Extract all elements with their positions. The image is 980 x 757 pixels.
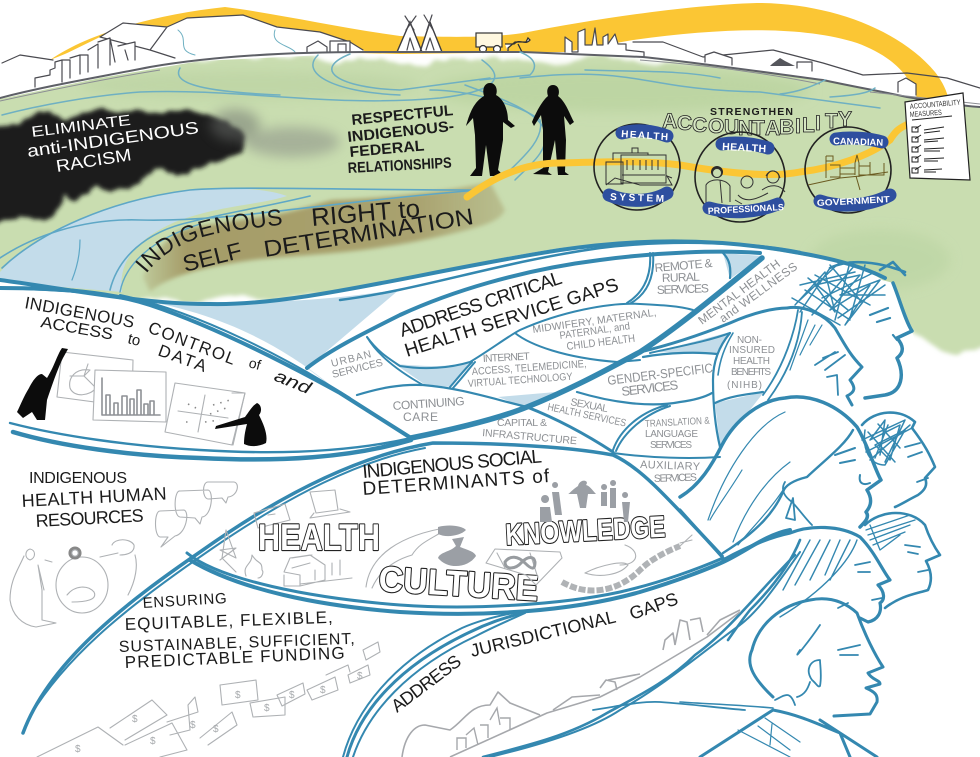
dollar bills <box>37 642 380 757</box>
jurisdictional gaps upper edge <box>347 612 525 757</box>
dollar bills: $ <box>357 671 363 682</box>
green landscape wash <box>0 60 980 352</box>
figure: right person <box>532 85 574 175</box>
heading: INDIGENOUS <box>29 470 127 487</box>
flowing ribbon lines <box>0 241 885 757</box>
dollar bills: $ <box>320 685 326 696</box>
heading <box>119 590 355 672</box>
laptop icon <box>310 490 350 518</box>
heading: RESOURCES <box>35 505 144 531</box>
right houses and mining <box>705 52 812 71</box>
text: respectful relationships: INDIGENOUS- <box>347 118 455 146</box>
services labels: SEXUAL <box>569 396 609 415</box>
address panel upper thick line <box>307 252 760 368</box>
heading: ADDRESS <box>387 651 465 716</box>
panel: Indigenous control of and access to data <box>17 293 315 446</box>
infinity flag <box>486 549 562 585</box>
jurisdictional gaps lower edge <box>483 555 795 757</box>
social determinants bottom <box>187 553 723 607</box>
grey landscape with road and city <box>402 610 740 757</box>
yellow accountability ribbon: lower <box>467 124 908 197</box>
services labels: ACCESS, TELEMEDICINE, <box>471 358 587 378</box>
services labels: REMOTE & <box>654 256 713 275</box>
services labels: VIRTUAL TECHNOLOGY <box>467 371 573 390</box>
heading text: and <box>272 366 315 398</box>
left city skyline <box>35 38 135 87</box>
blue river wash <box>0 188 287 292</box>
panel: address jurisdictional gaps <box>387 589 740 757</box>
braid and sweetgrass <box>562 546 680 591</box>
main diagonal <box>411 258 762 438</box>
services labels: GENDER-SPECIFIC <box>607 360 714 388</box>
two figures standing <box>466 83 574 176</box>
services labels: SERVICES <box>657 281 709 297</box>
heading: INDIGENOUS SOCIAL <box>362 446 543 483</box>
yellow accountability ribbon: top <box>50 3 949 102</box>
banner: health: HEALTH <box>722 141 766 155</box>
face 7: bottom man <box>700 599 883 757</box>
services labels: CARE <box>403 410 438 424</box>
chart board: scatter <box>165 383 245 445</box>
text: eliminate anti-Indigenous racism <box>26 112 200 176</box>
feather and rock <box>366 526 476 588</box>
figure: left person <box>466 83 515 176</box>
text: Indigenous right to self determination: SELF <box>180 237 244 277</box>
checklist rows <box>912 116 952 173</box>
heading: EQUITABLE, FLEXIBLE, <box>124 608 333 634</box>
text: eliminate anti-Indigenous racism: RACISM <box>55 145 133 176</box>
services labels: SERVICES <box>654 472 697 485</box>
heading: ADDRESS CRITICAL <box>397 268 565 342</box>
services labels: BENEFITS <box>731 367 771 378</box>
chart board: pie <box>57 352 133 407</box>
left mountain outline <box>2 15 363 63</box>
text: eliminate anti-Indigenous racism: ELIMINATE <box>30 112 132 141</box>
banner: system: SYSTEM <box>610 192 664 205</box>
right mountains <box>633 42 980 88</box>
lower left hint to face <box>680 702 773 708</box>
banner: Canadian: CANADIAN <box>833 136 883 149</box>
heading: GAPS <box>627 589 681 624</box>
dollar bills: $ <box>289 690 295 701</box>
panel: ensuring funding <box>37 590 380 757</box>
circle: health system <box>594 124 680 210</box>
services labels: INFRASTRUCTURE <box>482 427 577 447</box>
panel: Indigenous health human resources <box>10 470 237 627</box>
white ribbon body <box>0 242 980 757</box>
heading <box>362 446 551 500</box>
services labels: and WELLNESS <box>717 259 800 325</box>
word: culture: CULTURE <box>378 558 540 609</box>
face 4: right short hair <box>862 413 935 507</box>
heading: ENSURING <box>142 590 227 612</box>
text: Indigenous right to self determination: RIGHT to <box>310 195 421 232</box>
heading text <box>23 293 315 398</box>
heading: HEALTH HUMAN <box>21 483 167 511</box>
face 3: long hair woman <box>680 397 881 558</box>
face 5: right lower <box>865 513 940 608</box>
services labels: MIDWIFERY, MATERNAL, <box>532 307 657 336</box>
mountains, city and horizon line <box>0 15 980 107</box>
accountability measures checklist: ACCOUNTABILITY <box>909 98 961 111</box>
services labels: NON- <box>737 335 762 346</box>
houses <box>307 41 350 52</box>
olive band: self determination <box>143 182 505 292</box>
services labels: URBAN <box>330 348 373 370</box>
services labels: SERVICES <box>621 377 679 399</box>
tree and fire <box>220 530 263 578</box>
text: eliminate anti-Indigenous racism: anti-INDIGENOUS <box>26 118 200 161</box>
parliament building <box>808 155 888 190</box>
social determinants top <box>23 443 722 733</box>
services labels: MENTAL HEALTH <box>695 257 783 327</box>
dollar bills: $ <box>213 724 219 735</box>
text: respectful relationships: FEDERAL <box>349 138 425 161</box>
dollar bills: $ <box>132 714 138 725</box>
services labels: SERVICES <box>331 357 384 381</box>
dollar bills: $ <box>150 736 156 747</box>
services labels: HEALTH <box>733 356 770 367</box>
heading: SUSTAINABLE, SUFFICIENT, <box>119 631 355 656</box>
faces in profile <box>680 262 940 757</box>
house icon <box>284 555 352 586</box>
river outlines around wash <box>0 188 480 292</box>
heading: DETERMINANTS of <box>362 466 551 500</box>
heading text: of <box>247 354 263 373</box>
heading text: DATA <box>156 341 210 376</box>
heading text: to <box>126 330 142 350</box>
dollar bills: $ <box>190 720 196 731</box>
river lines across the plains <box>2 52 880 180</box>
dollar bills: $ <box>264 703 270 714</box>
left mountains <box>0 15 367 99</box>
three people <box>706 166 785 205</box>
dollar bills: $ <box>235 690 241 701</box>
services labels: LANGUAGE <box>645 429 698 440</box>
accountability measures checklist: MEASURES <box>910 108 942 119</box>
word: knowledge: KNOWLEDGE <box>505 511 666 552</box>
horizon line <box>0 52 980 107</box>
sky cover <box>0 0 980 107</box>
text: Indigenous right to self determination: INDIGENOUS <box>135 209 282 272</box>
services labels: SERVICES <box>650 440 692 451</box>
panel: address critical health service gaps <box>330 256 800 485</box>
figure pointing at chart <box>17 348 68 420</box>
money icon <box>254 504 290 528</box>
face 6: middle woman <box>723 527 890 640</box>
heading text: CONTROL <box>146 318 238 369</box>
services labels: CAPITAL & <box>497 417 547 429</box>
heading <box>387 589 681 716</box>
data panel upper edge <box>0 288 411 438</box>
heading: JURISDICTIONAL <box>468 607 618 661</box>
continuing care to sexual health <box>527 407 613 452</box>
heading: HEALTH SERVICE GAPS <box>402 275 621 362</box>
services labels: PATERNAL, and <box>559 320 631 342</box>
services labels <box>330 256 800 485</box>
services labels: CHILD HEALTH <box>566 333 636 353</box>
face 1: top <box>792 262 912 398</box>
dollar bills: $ <box>75 744 81 755</box>
heading text: INDIGENOUS <box>23 293 136 332</box>
blue washes inside the ribbon <box>130 253 764 447</box>
circle: Canadian government <box>805 127 891 213</box>
services labels: CONTINUING <box>392 394 465 413</box>
heading: strengthen accountability: ACCOUNTABILITY <box>662 108 852 140</box>
hospital building <box>606 148 672 185</box>
services labels: (NIHB) <box>727 380 762 391</box>
services labels: TRANSLATION & <box>645 416 710 430</box>
face 2: headscarf woman <box>763 307 862 405</box>
services labels: INTERNET <box>483 351 531 365</box>
data panel lower edges <box>10 423 411 452</box>
heading: PREDICTABLE FUNDING <box>124 643 345 672</box>
figure gesturing at scatter <box>215 403 267 446</box>
panel: Indigenous social determinants <box>220 446 692 609</box>
text: respectful relationships: RELATIONSHIPS <box>347 155 452 177</box>
services labels: HEALTH SERVICES <box>546 401 627 430</box>
heading text: ACCESS <box>39 314 114 344</box>
cell dividers <box>367 304 693 368</box>
accountability measures checklist <box>905 93 970 180</box>
circle: health professionals <box>695 132 785 222</box>
healthcare people sketch <box>10 540 136 627</box>
text: Indigenous right to self determination <box>135 195 475 277</box>
text: Indigenous right to self determination: DETERMINATION <box>262 203 475 262</box>
word: health: HEALTH <box>258 517 380 558</box>
wagon and horse <box>476 33 530 52</box>
text: respectful relationships: RESPECTFUL <box>351 102 454 129</box>
banner: health: HEALTH <box>621 129 668 143</box>
banner: professionals: PROFESSIONALS <box>708 202 784 216</box>
left snow river <box>178 30 295 55</box>
services labels: RURAL <box>662 270 700 285</box>
speech bubbles <box>156 482 237 547</box>
chart board: bars <box>93 370 166 422</box>
heading: strengthen accountability: STRENGTHEN <box>710 106 793 118</box>
tipis <box>397 15 442 52</box>
top band <box>0 241 885 304</box>
heading <box>21 470 167 531</box>
text: respectful relationships <box>347 102 455 177</box>
black smoke: eliminate racism <box>0 109 340 228</box>
banner: government: GOVERNMENT <box>817 194 891 208</box>
services labels: AUXILIARY <box>640 459 701 473</box>
services labels: INSURED <box>729 345 775 356</box>
right city skyline <box>565 28 644 57</box>
people silhouettes <box>540 480 630 522</box>
